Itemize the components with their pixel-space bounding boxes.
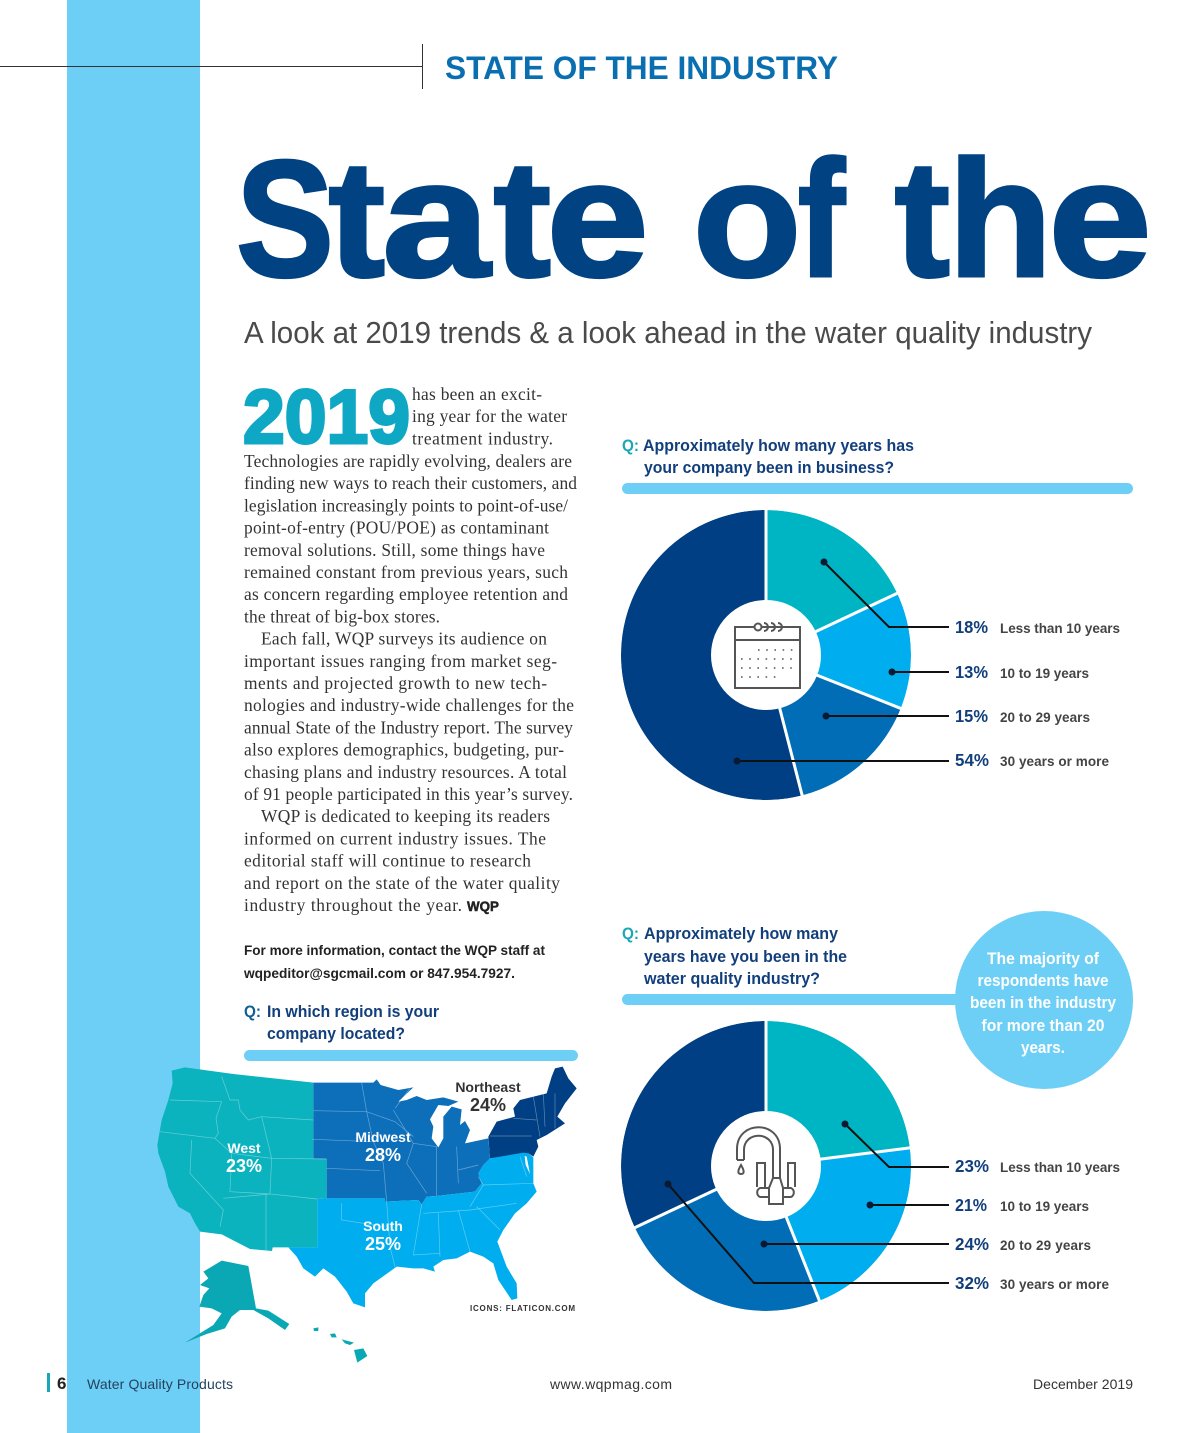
region label: Northeast: Northeast [455,1079,521,1095]
callout circle [955,911,1133,1089]
callout circle: years. [1021,1039,1065,1057]
legend: years in industry: 32% [955,1273,989,1293]
legend: years in business: 13% [955,662,988,682]
leader dots [734,558,896,764]
question: years in business: your company been in business? [644,458,894,477]
question: region [244,1002,439,1043]
legend: years in business: 30 years or more [1000,754,1109,769]
sidebar band [67,0,200,1433]
article body text: of 91 people participated in this year’s survey. [244,784,573,804]
region label: Midwest: Midwest [355,1129,411,1145]
legend: years in business: 15% [955,706,988,726]
legend: years in business: 10 to 19 years [1000,666,1089,681]
title: a [382,127,492,312]
legend: years in business [955,617,1120,770]
article body text: annual State of the Industry report. The survey [244,717,573,737]
region: Alaska [185,1261,289,1343]
legend: years in industry: 20 to 29 years [1000,1238,1091,1253]
legend: years in business: 20 to 29 years [1000,710,1090,725]
region: West [157,1067,327,1251]
contact note: For more information, contact the WQP staff at [244,942,545,958]
region label: West [226,1140,262,1176]
region label: South: 25% [365,1234,401,1254]
legend: years in industry: 21% [955,1195,987,1215]
contact note: wqpeditor@sgcmail.com or 847.954.7927. [243,965,515,981]
state borders [160,1077,555,1267]
region question bar [244,1050,578,1061]
callout circle: for more than 20 [982,1017,1104,1035]
article body text: removal solutions. Still, some things have [244,540,545,560]
article body text: as concern regarding employee retention and [244,584,568,604]
drop year: 2019 [243,375,410,460]
article body text: Technologies are rapidly evolving, dealers are [244,451,572,471]
leader dots [664,1120,874,1248]
legend: years in industry [955,1156,1120,1293]
article body text: Each fall, WQP surveys its audience on [261,629,547,649]
question: region: Q: [244,1002,261,1021]
question: years in industry: years have you been in the [644,947,847,966]
article body text: and report on the state of the water quality [244,873,560,893]
article body text: also explores demographics, budgeting, pur- [244,740,564,760]
question: years in industry: Approximately how many [644,924,839,943]
donut chart: years in industry [620,1020,949,1312]
chesapeake bay [525,1156,530,1174]
icon credit: ICONS: FLATICON.COM [470,1304,575,1313]
question: years in business: Q: [622,436,639,455]
region label: West: West [227,1140,261,1156]
header rule [0,44,422,89]
icon: faucet [737,1127,795,1204]
question: region: company located? [267,1024,405,1043]
region: Northeast [488,1067,577,1158]
region label: Midwest [355,1129,411,1165]
region: Hawaii [313,1327,367,1363]
question: years in business [622,436,914,477]
article body text: remained constant from previous years, such [244,562,568,582]
title [236,127,1152,312]
title: t [894,127,950,312]
callout circle: been in the industry [970,994,1117,1012]
article body text: has been an excit- [412,384,542,404]
leader lines [668,1124,949,1283]
section label: STATE OF THE INDUSTRY [445,50,838,86]
callout circle: respondents have [978,972,1108,990]
leader lines [737,562,949,761]
subtitle: A look at 2019 trends & a look ahead in the water quality industry [244,315,1092,350]
article body text: ments and projected growth to new tech- [244,673,547,693]
title: e [1048,127,1152,312]
article body text: important issues ranging from market seg- [244,651,557,671]
article body text: nologies and industry-wide challenges for the [244,695,574,715]
question: years in industry: water quality industry? [643,969,820,988]
article body text: the threat of big-box stores. [244,606,440,626]
article body text: editorial staff will continue to research [244,851,531,871]
article body text: finding new ways to reach their customers, and [244,473,577,493]
legend: years in business: 18% [955,617,988,637]
region label: South: South [363,1218,403,1234]
business question bar [622,483,1133,494]
donut chart: years in business [620,509,949,800]
title: t [493,127,551,312]
article body text: treatment industry. [412,428,553,448]
legend: years in business: 54% [955,750,989,770]
industry question bar [622,994,972,1005]
legend: years in industry: Less than 10 years [1000,1160,1120,1175]
question: years in industry: Q: [622,924,639,943]
article body text: WQP is dedicated to keeping its readers [261,806,550,826]
footer [47,1373,1133,1393]
legend: years in industry: 10 to 19 years [1000,1199,1089,1214]
title: S [236,127,334,312]
legend: years in industry: 30 years or more [1000,1277,1109,1292]
legend: years in business: Less than 10 years [1000,621,1120,636]
region label: West: 23% [226,1156,262,1176]
footer: Water Quality Products [87,1376,233,1392]
article body text: legislation increasingly points to point-of-use/ [244,495,568,515]
question: region: In which region is your [267,1002,439,1021]
map: US regions [157,1067,577,1363]
footer: 6 [57,1374,66,1393]
region: South [288,1153,537,1307]
region label: South [363,1218,403,1254]
region: Midwest [313,1079,490,1204]
article body text [244,384,577,915]
region label: Northeast [455,1079,521,1115]
footer: December 2019 [1033,1376,1133,1392]
legend: years in industry: 24% [955,1234,989,1254]
icon: calendar [735,623,800,688]
legend: years in industry: 23% [955,1156,989,1176]
title: e [546,127,649,312]
title: f [798,127,846,312]
title: o [693,127,801,312]
contact note [243,942,545,981]
region label: Northeast: 24% [470,1095,506,1115]
title: t [328,127,385,312]
title: h [948,127,1052,312]
question: years in business: Approximately how many years has [643,436,914,455]
article body text: WQP [467,898,499,914]
region label: Midwest: 28% [365,1145,401,1165]
article body text: ing year for the water [412,406,567,426]
footer: www.wqpmag.com [549,1376,672,1392]
map shapes [157,1067,577,1363]
article body text: point-of-entry (POU/POE) as contaminant [244,518,549,538]
callout circle: The majority of [987,950,1099,968]
article body text: informed on current industry issues. The [244,828,546,848]
question: years in industry [622,924,847,988]
article body text: chasing plans and industry resources. A total [244,762,567,782]
article body text: industry throughout the year. [244,895,462,915]
